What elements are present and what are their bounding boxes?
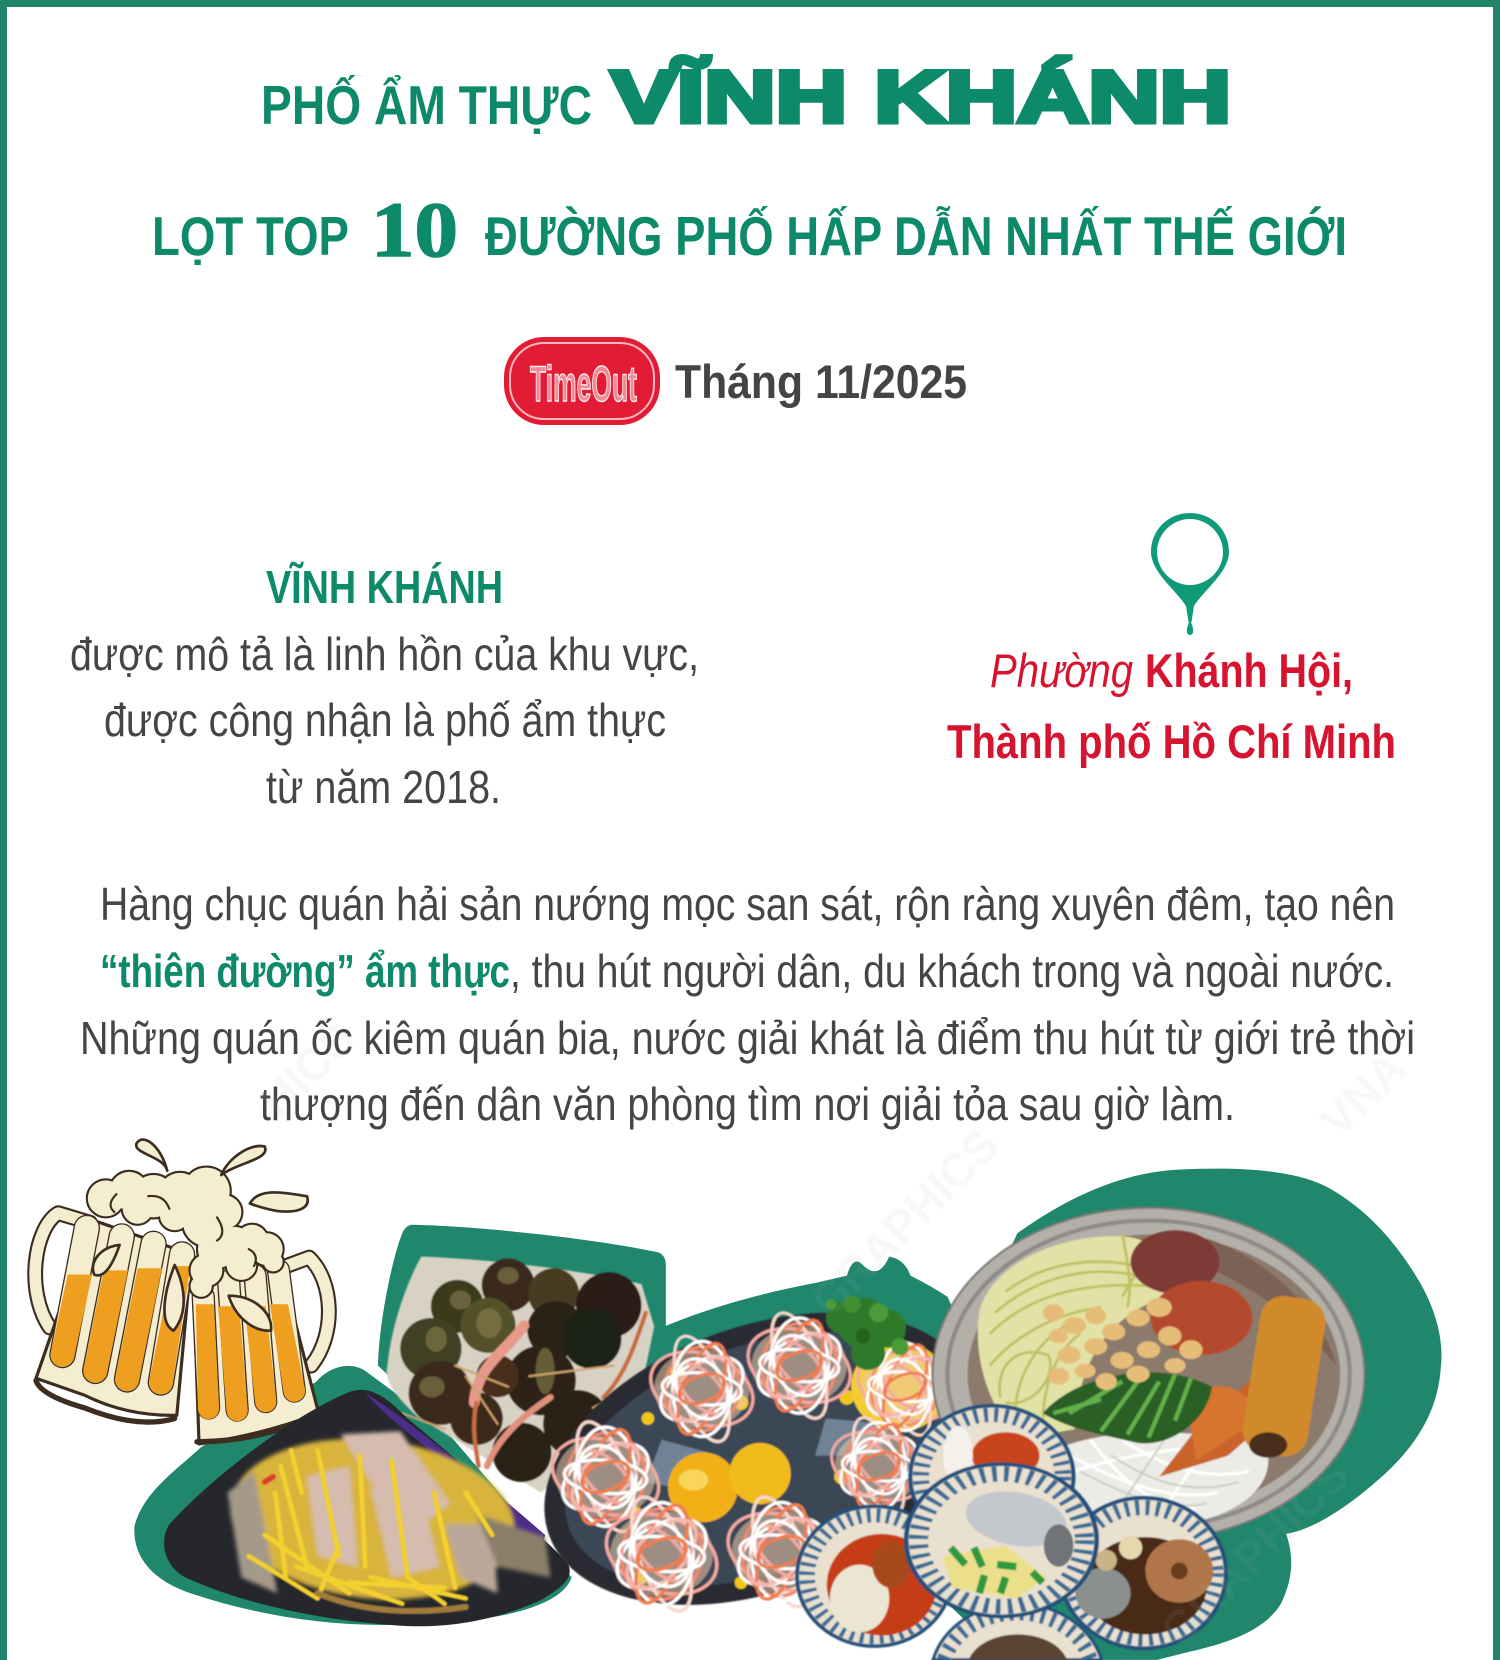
seafood plate [504, 1258, 1016, 1660]
icon: location pin [1151, 513, 1229, 635]
body paragraph [80, 878, 1415, 1130]
bowl: bottom [933, 1604, 1101, 1660]
location text: Thành phố Hồ Chí Minh [947, 715, 1396, 768]
title line 2 [152, 186, 1347, 273]
snail plate [387, 1257, 654, 1493]
intro text block: được mô tả là linh hồn của khu vực, [70, 628, 699, 680]
intro text block: được công nhận là phố ẩm thực [104, 694, 666, 746]
Time Out logo [504, 337, 660, 425]
watermarks: HICS [250, 1013, 365, 1127]
title line 2: ĐƯỜNG PHỐ HẤP DẪN NHẤT THẾ GIỚI [485, 205, 1347, 267]
bowl: right with mushroom [1061, 1498, 1226, 1648]
fish plate [164, 1390, 570, 1626]
watermarks: GRAPHICS [1150, 1449, 1359, 1657]
title line 1 [261, 57, 1231, 138]
location text: Khánh Hội, [1145, 644, 1353, 697]
right mug [194, 1258, 329, 1444]
title line 2: LỌT TOP [152, 205, 349, 267]
watermarks: VNA [1310, 1042, 1416, 1147]
parsley garnish [826, 1296, 908, 1370]
small bowls [797, 1406, 1226, 1660]
green blobs behind food [134, 1169, 1442, 1660]
bowl: left with fish ball [797, 1506, 952, 1646]
Time Out logo: TimeOut [530, 356, 637, 412]
watermarks [250, 1013, 1416, 1657]
bowl: centre with oyster [906, 1464, 1097, 1616]
foam drips and splashes [93, 1140, 308, 1331]
location text [947, 644, 1396, 768]
title line 1: PHỐ ẨM THỰC [261, 74, 592, 136]
beer foam [88, 1168, 283, 1297]
title line 1: VĨNH KHÁNH [611, 57, 1231, 138]
date: Tháng 11/2025 [675, 355, 967, 408]
intro text block [70, 561, 699, 813]
watermarks: GRAPHICS [800, 1119, 1009, 1327]
bowl: top with sauce [910, 1406, 1073, 1548]
food illustration [35, 1140, 1442, 1660]
title line 2: 10 [371, 186, 458, 273]
intro text block: từ năm 2018. [266, 761, 501, 813]
left mug [35, 1213, 192, 1422]
noodle bowl [933, 1208, 1365, 1540]
intro text block: VĨNH KHÁNH [266, 561, 503, 613]
body paragraph: thượng đến dân văn phòng tìm nơi giải tỏa sau giờ làm. [260, 1078, 1235, 1130]
body paragraph: “thiên đường” ẩm thực [100, 945, 510, 997]
location text: Phường [990, 644, 1133, 697]
icon: beer mugs [35, 1140, 329, 1444]
